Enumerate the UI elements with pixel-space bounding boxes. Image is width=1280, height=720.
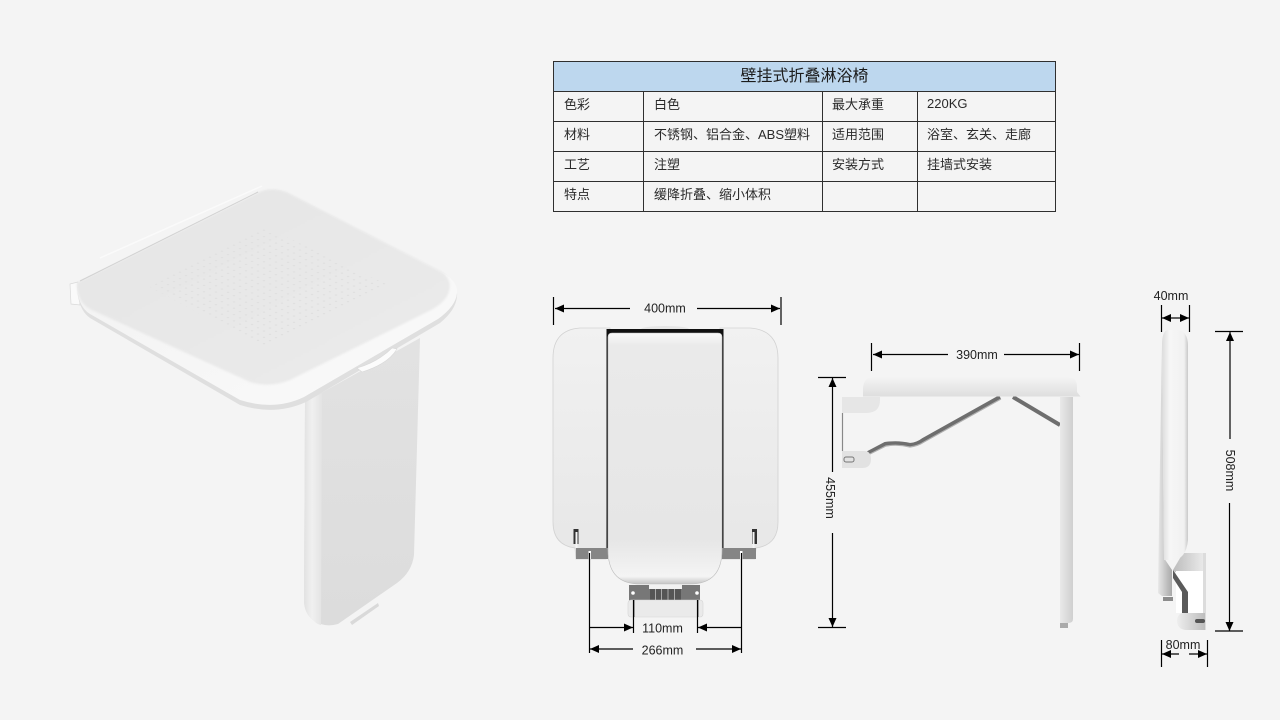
dimension: 40mm thickness [1154, 289, 1190, 332]
dimension: 390mm depth [872, 343, 1080, 371]
row: material and scope: 不锈钢、铝合金、ABS塑料 [654, 126, 810, 142]
dimension: 508mm folded height: 508mm [1223, 450, 1237, 491]
dimension: 455mm height [818, 378, 846, 628]
row: material and scope [564, 126, 1031, 142]
row: colour and max load: 色彩 [564, 96, 590, 112]
row: colour and max load: 白色 [654, 96, 680, 112]
dimension: 266mm mounting span [590, 553, 742, 658]
row: material and scope: 材料 [564, 126, 590, 142]
row: material and scope: 浴室、玄关、走廊 [927, 126, 1031, 142]
row: process and installation: 安装方式 [832, 156, 884, 172]
dimension: 110mm mounting span [590, 600, 741, 636]
dimension: 400mm width [554, 297, 781, 325]
specification table [553, 61, 1056, 212]
dimension: 80mm bracket depth: 80mm [1166, 638, 1200, 652]
dimension: 400mm width: 400mm [644, 302, 686, 316]
dimension: 390mm depth: 390mm [956, 348, 998, 362]
side view drawing [842, 377, 1080, 628]
dimension: 110mm mounting span: 110mm [642, 622, 683, 636]
row: colour and max load: 220KG [927, 96, 967, 110]
row: material and scope: 适用范围 [832, 126, 884, 142]
row: colour and max load: 最大承重 [832, 96, 884, 112]
row: process and installation: 工艺 [564, 156, 590, 172]
product photo: isometric folding seat and specifications drawings [70, 190, 1243, 667]
row: process and installation [564, 156, 992, 172]
right-side folded view drawing [1158, 330, 1206, 630]
dimension: 508mm folded height [1215, 332, 1243, 631]
row: colour and max load [564, 96, 967, 112]
dimension: 40mm thickness: 40mm [1154, 289, 1188, 303]
dimension: 80mm bracket depth [1162, 638, 1208, 667]
front view drawing [553, 326, 778, 617]
row: process and installation: 挂墙式安装 [927, 156, 992, 172]
dimension: 266mm mounting span: 266mm [642, 644, 683, 658]
row: features [564, 186, 771, 202]
table title row: 壁挂式折叠淋浴椅 [740, 68, 869, 85]
table title row [554, 62, 1055, 202]
dimension: 455mm height: 455mm [823, 477, 837, 519]
row: process and installation: 注塑 [654, 156, 680, 172]
isometric product view [70, 186, 457, 625]
row: features: 缓降折叠、缩小体积 [654, 186, 771, 202]
row: features: 特点 [564, 186, 590, 202]
